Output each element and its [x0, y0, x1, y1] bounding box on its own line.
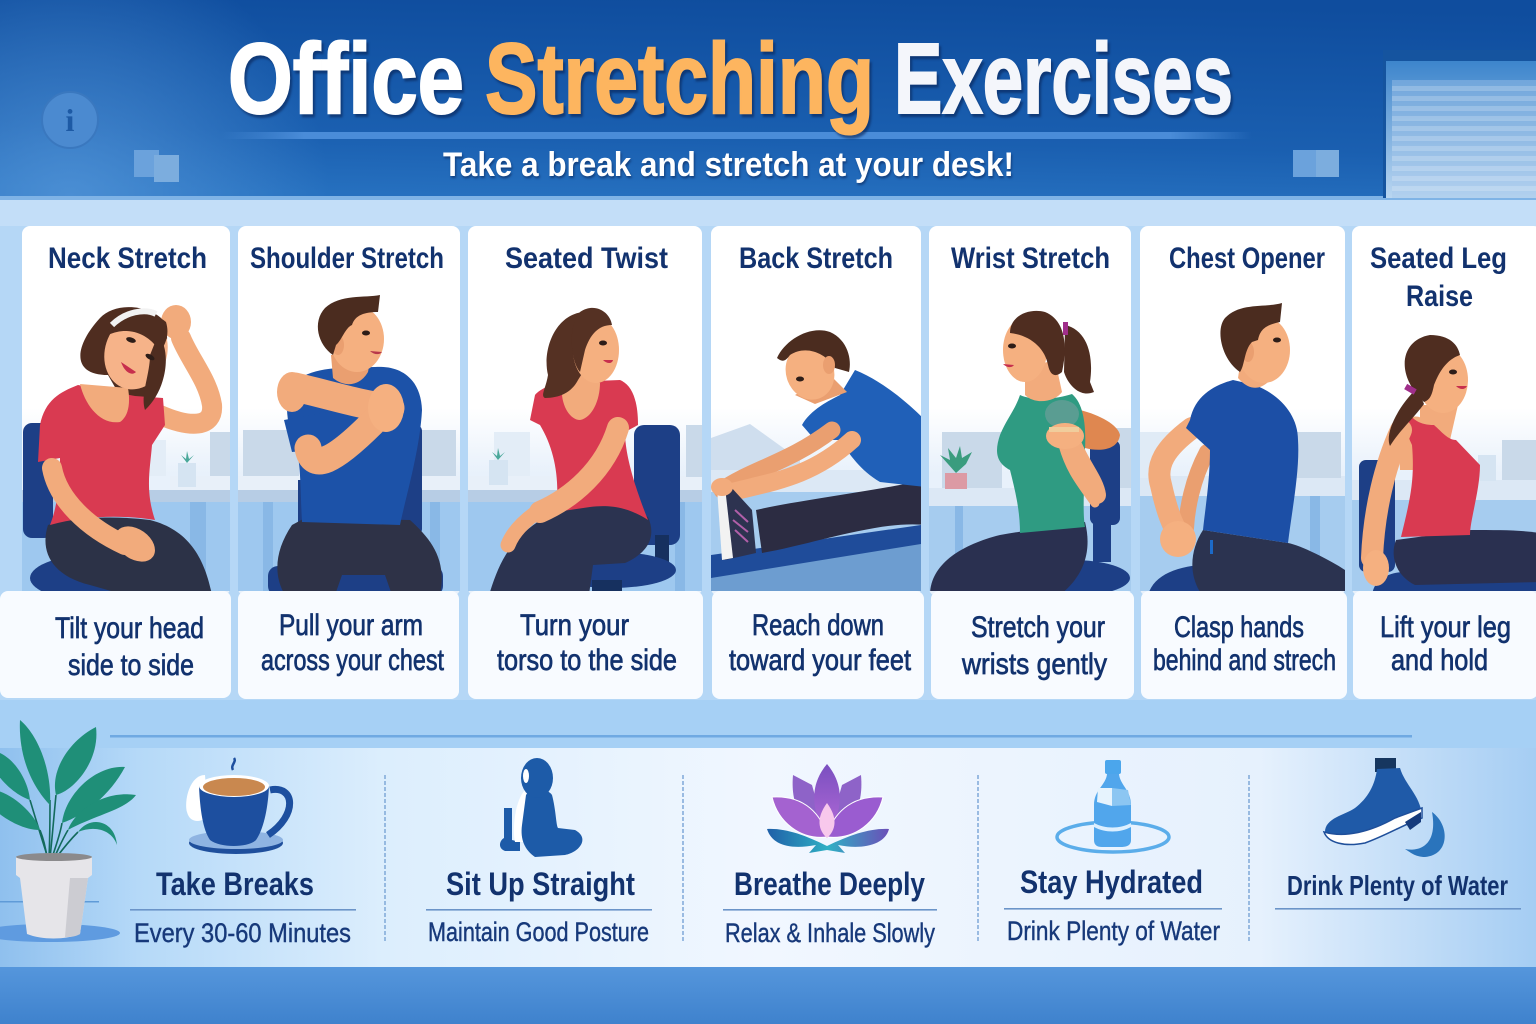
panel: seated twist: [468, 226, 704, 699]
caption: across your chest: [261, 644, 445, 677]
icon: sneaker and splash: [1324, 758, 1445, 857]
heading: Neck Stretch: [48, 242, 207, 275]
icon: folded cards left: [134, 150, 179, 182]
icon: info badge: [42, 92, 98, 148]
caption: Stretch your: [971, 611, 1105, 644]
heading: Wrist Stretch: [951, 242, 1110, 275]
figure: woman twisting: [489, 308, 680, 595]
office scene 6: [1140, 432, 1345, 592]
caption: [712, 591, 924, 699]
icon: seated person: [500, 758, 582, 857]
header band: [0, 0, 1536, 200]
caption: Reach down: [752, 609, 884, 642]
icon: coffee cup: [186, 758, 290, 854]
caption: side to side: [68, 649, 194, 682]
heading: Raise: [1406, 280, 1473, 313]
figure: man clasping hands behind: [1148, 303, 1345, 595]
window with blinds: [1383, 50, 1536, 198]
caption: [468, 591, 703, 699]
title: Office: [228, 23, 464, 135]
icon: info badge: i: [66, 102, 75, 138]
caption: Turn your: [520, 609, 629, 642]
tip: breathe deeply: Breathe Deeply: [734, 866, 925, 902]
tip: breathe deeply: [723, 764, 937, 948]
caption: [931, 591, 1134, 699]
caption: behind and strech: [1153, 644, 1336, 677]
panel: neck stretch: [0, 226, 232, 698]
title: [228, 23, 1233, 135]
caption: Pull your arm: [279, 609, 423, 642]
panel: shoulder stretch: [238, 226, 460, 699]
subtitle: Take a break and stretch at your desk!: [443, 146, 1014, 184]
tip: take breaks: [130, 758, 356, 948]
title: Stretching: [485, 23, 874, 135]
tip: sit up straight: [426, 758, 652, 947]
figure: woman tilting head: [23, 305, 212, 602]
caption: torso to the side: [497, 644, 677, 677]
caption: [238, 591, 459, 699]
title: Exercises: [894, 23, 1233, 135]
caption: wrists gently: [961, 648, 1107, 681]
figure: woman stretching wrists: [930, 311, 1130, 596]
figure: man touching toes: [711, 330, 925, 560]
tip: sit up straight: Maintain Good Posture: [428, 917, 649, 947]
icon: water bottle: [1057, 760, 1169, 852]
caption: and hold: [1391, 644, 1488, 677]
heading: Seated Leg: [1370, 242, 1507, 275]
tip: breathe deeply: Relax & Inhale Slowly: [725, 918, 935, 948]
tip: take breaks: Every 30-60 Minutes: [134, 918, 351, 948]
panel: wellness tips: [0, 748, 1536, 967]
pot: [16, 853, 92, 938]
caption: Tilt your head: [55, 612, 204, 645]
heading: [1370, 242, 1507, 313]
tip: take breaks: Take Breaks: [156, 866, 314, 902]
office scene 1: [22, 432, 232, 592]
office scene 5: [929, 428, 1132, 596]
panel: chest opener: [1140, 226, 1347, 699]
office scene 7: [1352, 440, 1536, 592]
office scene 4: [711, 424, 921, 595]
caption: [0, 591, 231, 698]
heading: Back Stretch: [739, 242, 893, 275]
caption: Lift your leg: [1380, 611, 1511, 644]
panel: wrist stretch: [929, 226, 1134, 699]
heading: Shoulder Stretch: [250, 242, 444, 275]
caption: [1353, 591, 1536, 699]
figure: woman seated, leg raise: [1359, 335, 1536, 595]
office scene 3: [468, 425, 704, 592]
caption: [1141, 591, 1347, 699]
tip: stay hydrated: Drink Plenty of Water: [1007, 916, 1220, 946]
office scene 2: [238, 430, 460, 592]
panel: back stretch: [711, 226, 925, 699]
icon: lotus: [767, 764, 889, 853]
tip: stay hydrated: [1004, 760, 1222, 946]
plant: [0, 720, 136, 942]
tip: stay hydrated: Stay Hydrated: [1020, 864, 1203, 900]
heading: Chest Opener: [1169, 242, 1325, 275]
tip: sit up straight: Sit Up Straight: [446, 866, 635, 902]
tip: drink plenty of water: [1275, 758, 1521, 910]
caption: toward your feet: [729, 644, 912, 677]
icon: folded cards right: [1293, 150, 1339, 177]
panel: seated leg raise: [1352, 226, 1536, 699]
caption: Clasp hands: [1174, 611, 1304, 644]
dividers: [385, 775, 1249, 942]
figure: man pulling arm across chest: [268, 295, 443, 596]
heading: Seated Twist: [505, 242, 668, 275]
